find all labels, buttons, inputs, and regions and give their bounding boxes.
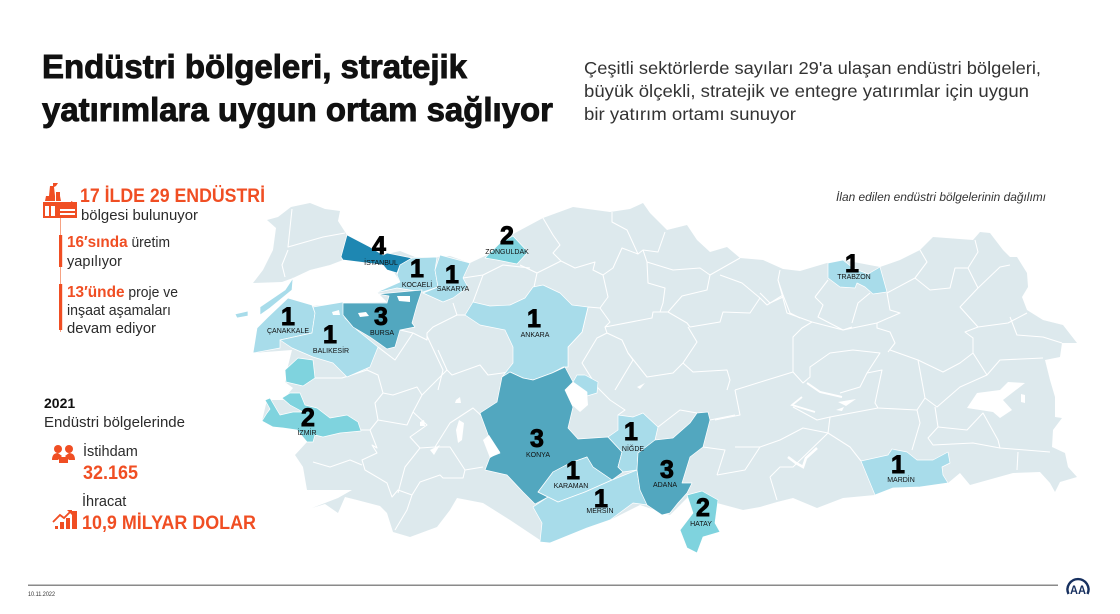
map value labels: MERSİN [586, 506, 614, 515]
map: Turkey provinces [235, 203, 1077, 553]
map value labels: BALIKESİR [313, 346, 349, 355]
map value labels: ADANA [653, 482, 677, 489]
subheading 2021 [44, 395, 185, 431]
title: Endüstri bölgeleri, stratejik [42, 48, 468, 85]
stat: 13 under construction: inşaat aşamaları [67, 303, 171, 319]
icon: factory [43, 183, 77, 218]
lakes and islands [332, 296, 1025, 467]
province: Trabzon [828, 260, 887, 294]
logo: AA: AA [1070, 583, 1086, 597]
title [42, 48, 553, 128]
map caption: İlan edilen endüstri bölgelerinin dağılımı [836, 192, 1046, 204]
province: Zonguldak [485, 236, 528, 264]
intro text [584, 58, 1041, 124]
title: yatırımlara uygun ortam sağlıyor [42, 91, 553, 128]
stat: 17 provinces headline: 17 İLDE 29 ENDÜSTRİ [80, 186, 265, 207]
map value labels: 3 [530, 425, 544, 453]
stat: 17 provinces headline [80, 186, 265, 224]
stat: exports: İhracat [82, 492, 126, 510]
map value labels: 1 [323, 321, 337, 349]
map value labels: ÇANAKKALE [267, 328, 309, 335]
map value labels: 1 [594, 485, 608, 513]
map value labels: HATAY [690, 521, 712, 528]
stat: 17 provinces headline: bölgesi bulunuyor [81, 208, 198, 224]
map value labels: 1 [566, 457, 580, 485]
base landmass [253, 203, 1077, 543]
stat: employment: İstihdam [83, 442, 138, 460]
intro text: büyük ölçekli, stratejik ve entegre yatırımlar için uygun [584, 81, 1029, 101]
province: Adana [637, 412, 710, 515]
highlighted provinces [235, 235, 950, 553]
stat: 13 under construction: devam ediyor [67, 321, 156, 337]
map value labels: KARAMAN [554, 483, 588, 490]
stat: exports [82, 492, 256, 534]
province: Aksaray [573, 375, 598, 396]
province: Sakarya [423, 255, 470, 302]
province: İzmir [262, 393, 361, 442]
province: Manisa [285, 358, 315, 386]
stat: employment: 32.165 [83, 463, 138, 484]
stat: employment [83, 442, 138, 484]
map value labels: 1 [845, 250, 859, 278]
map value labels: 3 [660, 456, 674, 484]
province: Kocaeli [375, 257, 438, 293]
map value labels [267, 222, 915, 528]
map value labels: 1 [410, 255, 424, 283]
map value labels: BURSA [370, 330, 394, 337]
province: Çanakkale [235, 278, 315, 353]
province: Mersin [533, 470, 648, 543]
map value labels: İZMİR [297, 428, 317, 437]
subheading 2021: Endüstri bölgelerinde [44, 415, 185, 431]
province: Mardin [861, 449, 950, 495]
map value labels: 3 [374, 303, 388, 331]
subheading 2021: 2021 [44, 395, 75, 411]
map value labels: KOCAELİ [402, 280, 432, 289]
map value labels: ZONGULDAK [485, 249, 529, 256]
stat: 16 producing [67, 234, 170, 270]
timeline connector [59, 218, 62, 332]
map value labels: ANKARA [521, 332, 550, 339]
map value labels: NİĞDE [622, 444, 644, 453]
province: Konya [480, 367, 623, 504]
map value labels: 2 [500, 222, 514, 250]
footer rule [28, 584, 1058, 586]
map value labels: 1 [527, 305, 541, 333]
date: 10.11.2022 [28, 591, 55, 598]
map value labels: 1 [891, 451, 905, 479]
province: Ankara [465, 285, 588, 380]
province: Niğde [608, 413, 658, 472]
province: Hatay [680, 491, 720, 553]
logo: AA [1068, 579, 1088, 597]
map value labels: 2 [696, 494, 710, 522]
map value labels: 1 [624, 418, 638, 446]
stat: 13 under construction: 13′ünde proje ve [67, 284, 178, 301]
stat: 13 under construction [67, 284, 178, 337]
intro text: Çeşitli sektörlerde sayıları 29'a ulaşan endüstri bölgeleri, [584, 58, 1041, 78]
province: Bursa [343, 290, 422, 349]
stat: 16 producing: yapılıyor [67, 254, 122, 270]
map value labels: TRABZON [837, 274, 871, 281]
province: İstanbul [341, 235, 412, 273]
province: Karaman [538, 457, 612, 502]
map value labels: MARDİN [887, 475, 915, 484]
map value labels: 2 [301, 404, 315, 432]
stat: 16 producing: 16′sında üretim [67, 234, 170, 251]
map value labels: İSTANBUL [364, 258, 398, 267]
map value labels: 4 [372, 232, 386, 260]
map value labels: 1 [281, 303, 295, 331]
icon: people [52, 445, 75, 463]
stat: exports: 10,9 MİLYAR DOLAR [82, 513, 256, 534]
province borders [282, 209, 1062, 530]
icon: rising chart [53, 510, 77, 529]
intro text: bir yatırım ortamı sunuyor [584, 104, 796, 124]
map value labels: 1 [445, 261, 459, 289]
map value labels: KONYA [526, 452, 550, 459]
map value labels: SAKARYA [437, 286, 470, 293]
province: Balıkesir [280, 302, 378, 377]
